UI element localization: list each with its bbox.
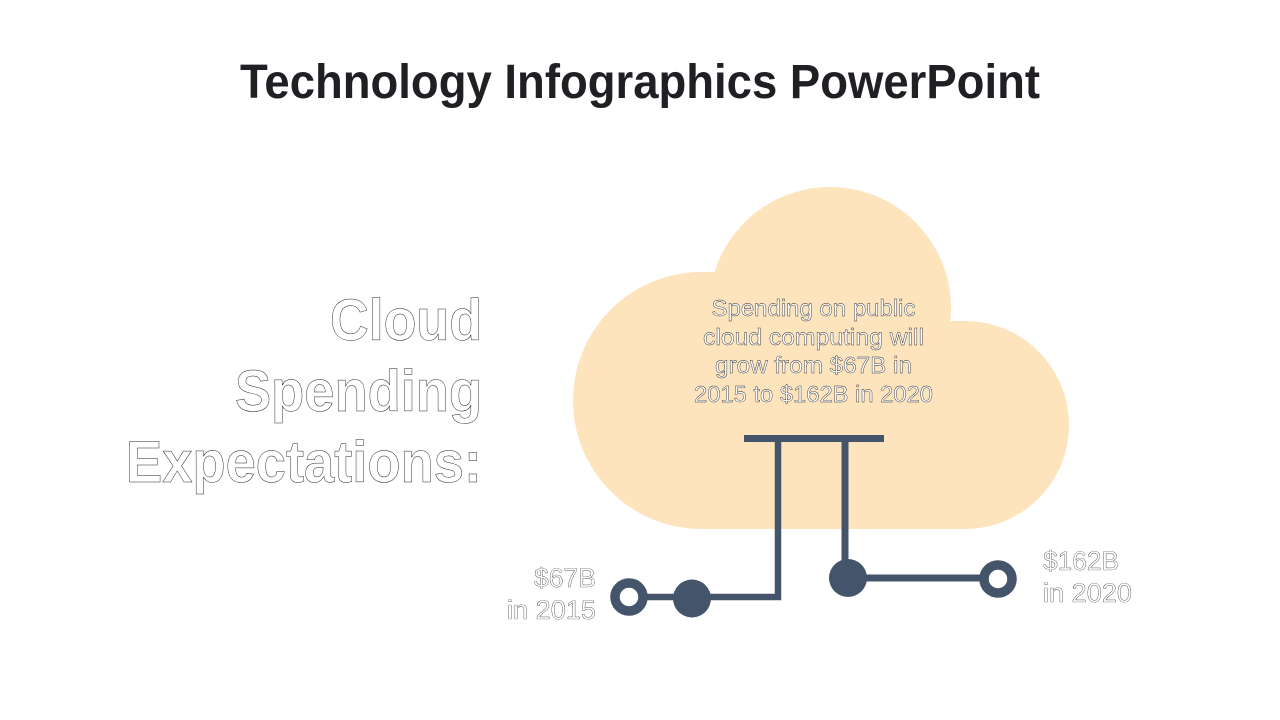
node: 2020 ring xyxy=(984,565,1012,593)
node: 2015 filled xyxy=(673,580,711,618)
cloud description text: grow from $67B in xyxy=(715,352,912,378)
heading: cloud spending expectations: Spending xyxy=(235,359,482,424)
label: 2020 value xyxy=(1043,546,1132,608)
label: 2015 value: $67B xyxy=(534,563,596,593)
label: 2015 value xyxy=(507,563,596,625)
connector: top bar xyxy=(744,435,884,442)
label: 2020 value: $162B xyxy=(1043,546,1119,576)
connector: 2015 line xyxy=(628,438,778,597)
cloud description text: cloud computing will xyxy=(703,324,924,350)
node: 2015 ring xyxy=(615,583,643,611)
cloud description text: 2015 to $162B in 2020 xyxy=(694,381,933,407)
label: 2015 value: in 2015 xyxy=(507,595,596,625)
label: 2020 value: in 2020 xyxy=(1043,578,1132,608)
cloud description text: Spending on public xyxy=(712,295,916,321)
heading: cloud spending expectations: Cloud xyxy=(330,288,482,353)
title: Technology Infographics PowerPoint xyxy=(240,56,1040,109)
cloud description text xyxy=(694,295,933,407)
heading: cloud spending expectations xyxy=(126,288,482,495)
node: 2020 filled xyxy=(829,559,867,597)
connector: 2020 line xyxy=(845,438,998,578)
cloud shape xyxy=(573,187,1069,529)
heading: cloud spending expectations: Expectations: xyxy=(126,430,482,495)
